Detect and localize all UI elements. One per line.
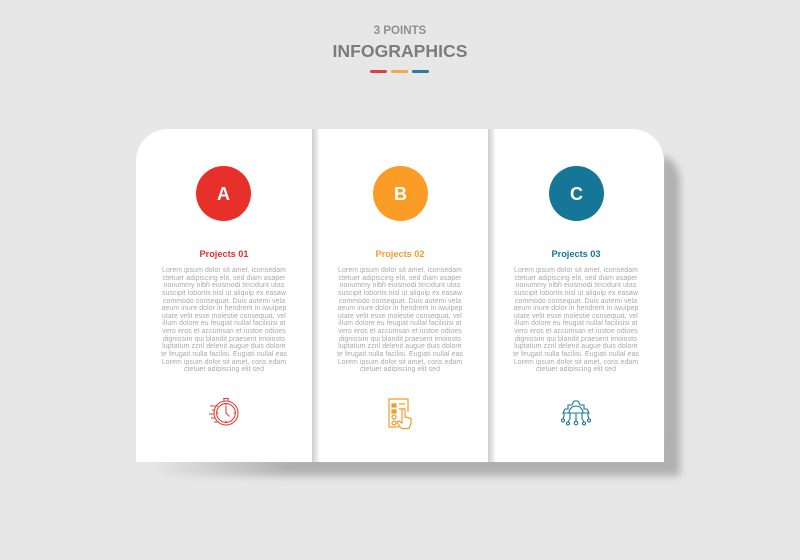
text B: dignissim qui blandit praesent imoiosto (339, 336, 461, 343)
text A: aeum iriure dolor in hendrerit in iwulpep (162, 305, 286, 312)
text B: illum dolore eu feugiat nullal facilisisi at (338, 320, 462, 327)
text B: ctetuer adipiscing elit, sed diam asaper (338, 275, 462, 282)
text A: ctetuer adipiscing elit, sed diam asaper (162, 275, 286, 282)
text C: ctetuer adipiscing elit, sed diam asaper (514, 275, 638, 282)
text C: utate velit esse molestie consequat, vel (514, 313, 638, 320)
text C: luptatum zzril delenit augue duis dolore (514, 343, 638, 350)
text A: luptatum zzril delenit augue duis dolore (162, 343, 286, 350)
text C: nonummy nibh euismodi tincidunt utas (516, 282, 636, 289)
text A: te feugait nulla facilisi. Eugiati nullal eas (161, 351, 287, 358)
text A: commodo consequat. Duis autemi vela (163, 298, 285, 304)
title: infographics: INFOGRAPHICS (333, 41, 467, 61)
text A: ctetuer adipiscing elit sed (184, 366, 264, 373)
panel: A (161, 166, 287, 426)
text A: utate velit esse molestie consequat, vel (162, 313, 286, 320)
text B: Lorem ipsum dolor sit amet, iconsedam (338, 267, 462, 274)
text B: Lorem ipsum dolor sit amet, cons edam (338, 358, 462, 366)
text B: ctetuer adipiscing elit sed (360, 366, 440, 373)
text A: illum dolore eu feugiat nullal facilisisi at (162, 320, 286, 327)
heading A: Projects 01 (199, 249, 249, 259)
icon: gear network (561, 400, 591, 426)
text A: vero eros et accumsan et iustoe odioes (162, 328, 286, 335)
icon: stopwatch (209, 398, 239, 426)
text C: dignissim qui blandit praesent imoiosto (515, 336, 637, 343)
text C: Lorem ipsum dolor sit amet, cons edam (514, 358, 638, 366)
colour dashes (370, 70, 429, 73)
badge C: C (570, 184, 583, 204)
badge A: A (217, 184, 230, 204)
panel: B (337, 166, 463, 430)
badge A (196, 166, 251, 221)
text B: suscipit lobortis nisl ut aliquip ex easaw (338, 290, 462, 297)
badge B: B (394, 184, 407, 204)
text C: aeum iriure dolor in hendrerit in iwulpep (514, 305, 638, 312)
text A: dignissim qui blandit praesent imoiosto (163, 336, 285, 343)
icon: checklist hand (388, 398, 412, 430)
heading C: Projects 03 (551, 249, 601, 259)
text C (513, 266, 639, 373)
text C: illum dolore eu feugiat nullal facilisisi at (514, 320, 638, 327)
text B: te feugait nulla facilisi. Eugiati nullal eas (337, 351, 463, 358)
badge C (549, 166, 604, 221)
text C: ctetuer adipiscing elit sed (536, 366, 616, 373)
text A (161, 266, 287, 373)
text B (337, 266, 463, 373)
title: 3 points: 3 POINTS (374, 25, 426, 37)
panel: card background (136, 129, 664, 462)
text B: utate velit esse molestie consequat, vel (338, 313, 462, 320)
text B: commodo consequat. Duis autemi vela (339, 298, 461, 304)
heading B: Projects 02 (375, 249, 425, 259)
text C: commodo consequat. Duis autemi vela (515, 298, 637, 304)
text A: Lorem ipsum dolor sit amet, cons edam (162, 358, 286, 366)
text C: Lorem ipsum dolor sit amet, iconsedam (514, 267, 638, 274)
text B: luptatum zzril delenit augue duis dolore (338, 343, 462, 350)
badge B (373, 166, 428, 221)
text B: nonummy nibh euismodi tincidunt utas (340, 282, 460, 289)
text B: aeum iriure dolor in hendrerit in iwulpep (338, 305, 462, 312)
text A: Lorem ipsum dolor sit amet, iconsedam (162, 267, 286, 274)
text A: nonummy nibh euismodi tincidunt utas (164, 282, 284, 289)
text C: te feugait nulla facilisi. Eugiati nullal eas (513, 351, 639, 358)
text B: vero eros et accumsan et iustoe odioes (338, 328, 462, 335)
text A: suscipit lobortis nisl ut aliquip ex easaw (162, 290, 286, 297)
divider shadows (312, 129, 494, 462)
text C: vero eros et accumsan et iustoe odioes (514, 328, 638, 335)
text C: suscipit lobortis nisl ut aliquip ex easaw (514, 290, 638, 297)
panel: C (513, 166, 639, 426)
